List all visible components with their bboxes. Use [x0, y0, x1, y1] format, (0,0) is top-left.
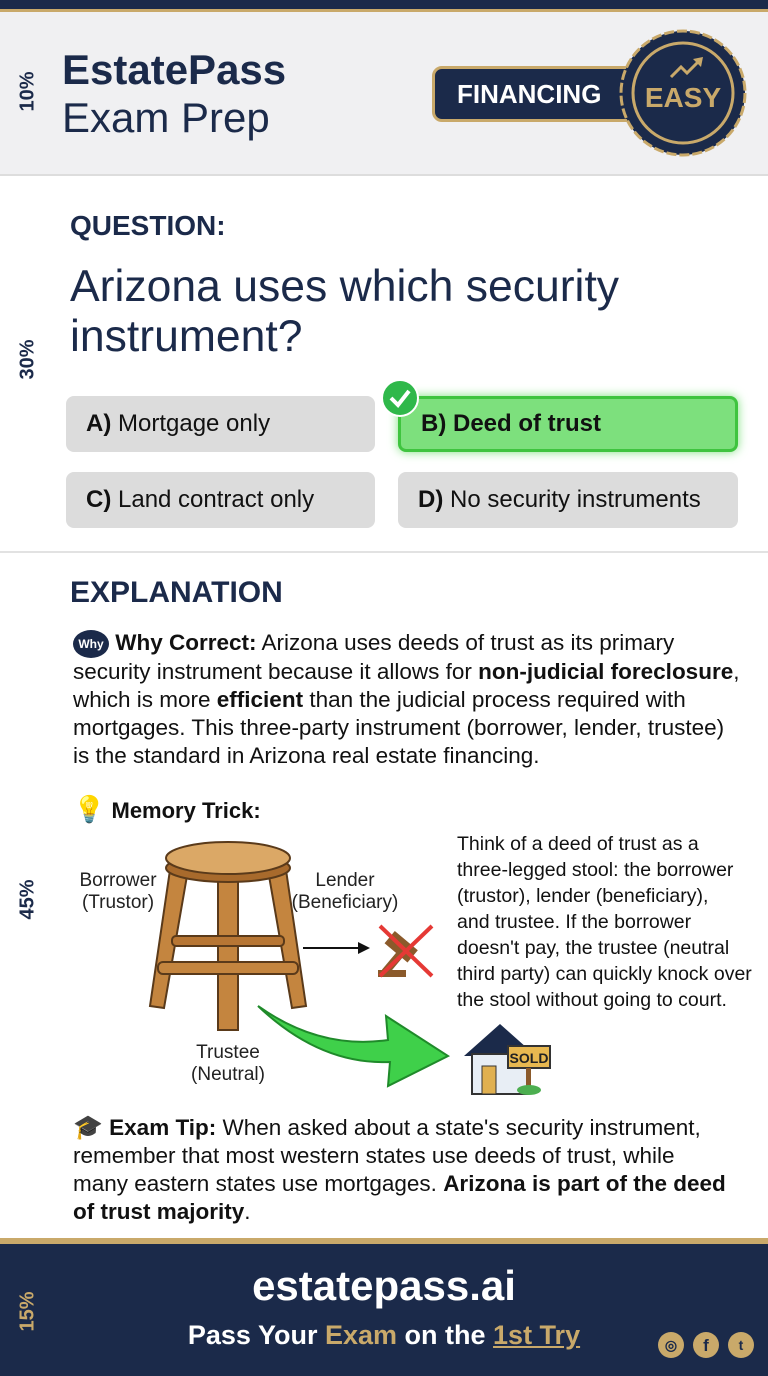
option C: C) [86, 486, 111, 513]
memory trick text: three-legged stool: the borrower [457, 859, 733, 881]
memory trick text: Think of a deed of trust as a [457, 833, 699, 855]
side label 10%: 10% [16, 71, 38, 112]
memory trick text: third party) can quickly knock over [457, 963, 752, 985]
question text: Arizona uses which security [70, 262, 619, 311]
question heading: QUESTION: [70, 210, 226, 241]
why correct text: which is more efficient than the judicial process required with [73, 687, 686, 712]
exam tip: 🎓 Exam Tip: When asked about a state's security instrument, [73, 1114, 701, 1141]
brand logo text: EstatePass [62, 46, 286, 93]
memory trick text: (trustor), lender (beneficiary), [457, 885, 708, 907]
option A: Mortgage only [118, 410, 270, 437]
side label 30%: 30% [16, 339, 38, 380]
tagline: Pass Your Exam on the 1st Try [188, 1320, 580, 1350]
why correct text [73, 630, 739, 768]
memory trick text [457, 833, 752, 1011]
side label 15%: 15% [16, 1291, 38, 1332]
question text [70, 262, 619, 361]
footer url: estatepass.ai [252, 1262, 516, 1309]
stool illustration: Lender [315, 870, 375, 891]
why correct text: Why [78, 637, 104, 651]
badge: financing easy [432, 30, 746, 156]
why correct text: mortgages. This three-party instrument (borrower, lender, trustee) [73, 715, 724, 740]
badge: financing easy: FINANCING [457, 79, 601, 109]
exam tip: remember that most western states use deeds of trust, while [73, 1143, 675, 1168]
brand logo text [62, 46, 286, 141]
stool illustration: Trustee [196, 1042, 260, 1063]
memory trick heading: 💡 Memory Trick: [73, 794, 261, 824]
memory trick text: doesn't pay, the trustee (neutral [457, 937, 729, 959]
icon: check [383, 381, 419, 417]
question text: instrument? [70, 312, 302, 361]
explanation heading: EXPLANATION [70, 576, 283, 609]
option C [66, 472, 375, 528]
stool illustration: Borrower [79, 870, 157, 891]
option D: No security instruments [450, 486, 701, 513]
stool illustration: (Trustor) [82, 892, 154, 913]
icon: sold house [464, 1024, 551, 1095]
icon: sold house: SOLD [510, 1050, 548, 1066]
exam tip: many eastern states use mortgages. Arizona is part of the deed [73, 1171, 726, 1196]
why correct text: Why Correct: Arizona uses deeds of trust as its primary [115, 630, 674, 655]
option B correct: Deed of trust [453, 410, 601, 437]
social icons [658, 1332, 754, 1358]
memory trick text: and trustee. If the borrower [457, 911, 691, 933]
option A: A) [86, 410, 111, 437]
footer [0, 1238, 768, 1376]
why correct text: is the standard in Arizona real estate financing. [73, 743, 540, 768]
badge: financing easy: EASY [645, 82, 721, 113]
option C: Land contract only [118, 486, 314, 513]
option D: D) [418, 486, 443, 513]
option D [398, 472, 738, 528]
stool illustration [79, 841, 450, 1088]
option B correct: B) [421, 410, 446, 437]
option B correct [398, 396, 738, 452]
header panel [0, 12, 768, 176]
stool illustration: (Neutral) [191, 1064, 265, 1085]
social icons: t [739, 1337, 743, 1353]
social icons: ◎ [665, 1337, 677, 1353]
exam tip [73, 1114, 726, 1224]
option A [66, 396, 375, 452]
exam tip: of trust majority. [73, 1199, 251, 1224]
side label 45%: 45% [16, 879, 38, 920]
stool illustration: (Beneficiary) [292, 892, 398, 913]
why correct text: security instrument because it allows for non-judicial foreclosure, [73, 659, 739, 684]
top bar [0, 0, 768, 12]
memory trick text: the stool without going to court. [457, 989, 727, 1011]
social icons: f [703, 1336, 709, 1355]
brand logo text: Exam Prep [62, 94, 270, 141]
